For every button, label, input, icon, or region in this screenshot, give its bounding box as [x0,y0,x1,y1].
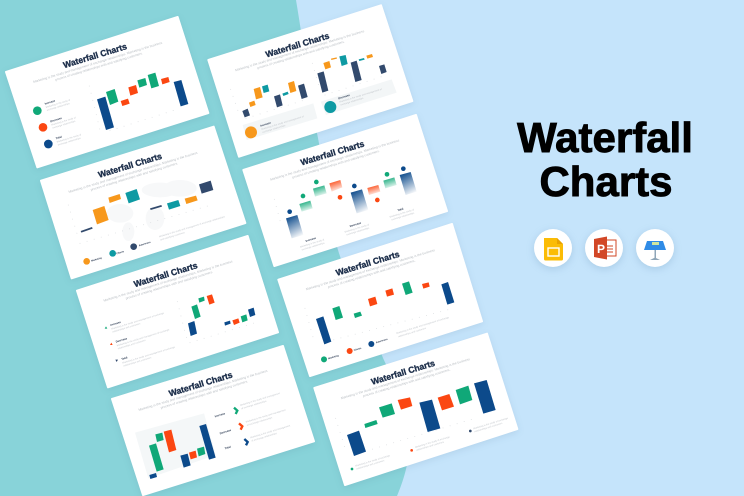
legend [33,99,81,148]
heading: Waterfall Charts [299,139,365,167]
axis ticks [68,204,213,243]
gradient waterfall chart [286,172,417,238]
legend: relationships and customers [117,339,146,350]
labels: exchange relationships [346,227,370,236]
descriptions: Marketing is the study and management [245,409,286,423]
left info panel [243,103,317,140]
legend [83,241,151,265]
descriptions: of exchange relationships [251,432,277,442]
heading: Waterfall Charts [335,249,401,278]
description: process of creating relationships with and satisfying customers. [125,270,214,300]
panel: slide 7 [112,346,314,495]
descriptions: of exchange relationships [246,416,273,427]
side note: and satisfying customers [160,231,185,241]
description: Marketing is the study and management of exchange relationships. Marketing is the business [235,29,365,72]
description: process of creating relationships with and satisfying customers. [327,259,416,289]
panel: slide 8 [314,334,517,485]
notes with bullets: Marketing is the study of exchange [355,454,390,467]
card background [6,17,208,167]
description: Marketing is the study and management of exchange relationships. Marketing is the business [340,357,470,400]
description: Marketing is the study and management of exchange relationships. Marketing is the business [33,41,163,84]
description: process of creating relationships with and satisfying customers. [362,368,451,398]
background: teal shape [0,0,410,496]
axis ticks [177,302,255,343]
decrease callout: Decrease [338,94,350,100]
axis ticks [89,86,175,131]
labels: exchange relationships [391,212,415,221]
waterfall chart [149,424,216,479]
card background [278,224,482,376]
increase callout [245,115,304,138]
description: Marketing is the study and management of exchange relationships. Marketing is the business [138,369,268,412]
labels: exchange relationships [301,242,325,251]
heading: Waterfall Charts [133,260,199,289]
axis ticks [305,308,453,342]
legend [321,338,388,362]
labels [300,207,415,251]
side note: Marketing is the study and management of exchange relationships [159,215,225,238]
heading: Waterfall Charts [97,151,163,180]
legend: Decrease [50,117,62,123]
side note: relationships and customers [398,327,426,338]
notes with bullets: Marketing is the study of exchange [473,417,508,430]
axis ticks [336,418,472,453]
legend: Marketing [328,354,339,360]
legend: Awareness [376,338,388,344]
legend labels: Decrease [219,429,232,435]
axis ticks [274,199,282,227]
legend: exchange relationships [57,137,81,146]
card background [41,127,245,278]
card background [112,346,314,495]
description: process of creating relationships with and satisfying customers. [160,380,249,410]
panel: slide 1 [6,17,208,167]
side note: Marketing is the study and management of exchange [396,316,449,335]
description: process of creating relationships with and satisfying customers. [292,149,380,179]
icon: Google Slides [534,229,572,267]
heading: Waterfall Charts [264,31,330,59]
legend: Marketing is the study and management of exchange [111,312,164,330]
icon: PowerPoint: P [597,242,605,256]
notes with bullets [351,417,508,470]
notes with bullets: relationships and customers [356,459,385,470]
waterfall chart [347,380,496,456]
increase callout: Marketing is the study and management of [261,115,304,131]
legend: Total [55,135,62,140]
decrease callout [324,88,382,113]
description: Marketing is the study and management of exchange relationships. Marketing is the business [270,139,400,182]
labels: Marketing is the study of [389,208,414,218]
legend: relationships and customers [112,322,141,333]
legend: Marketing [91,257,102,262]
panel: slide 3 [41,127,245,278]
legend: Marketing is the study and management of exchange [122,346,175,364]
decrease callout: exchange relationships [340,97,364,106]
waterfall chart [97,73,188,130]
legend: exchange relationships [52,120,76,129]
increase callout: Increase [260,121,271,127]
legend: Marketing is the study and management of exchange [116,328,170,347]
right info panel [321,79,397,115]
description: process of creating relationships with and satisfying customers. [55,52,143,82]
legend: Clients [353,347,362,352]
legend: Increase [44,99,56,105]
legend: Decrease [115,337,128,343]
notes with bullets: relationships and customers [474,422,503,433]
panel: slide 2 [208,5,412,157]
description: Marketing is the study and management of exchange relationships. Marketing is the business [305,248,435,291]
descriptions: Marketing is the study and management [240,392,280,407]
legend: Total [121,356,128,361]
labels: Increase [305,236,317,243]
increase callout: exchange relationships [262,124,286,134]
legend [105,312,175,367]
labels: Decrease [349,221,362,228]
panel: slide 6 [278,224,482,376]
main title: Waterfall [517,114,693,161]
legend labels: Total [224,445,231,450]
left waterfall chart [242,81,308,117]
notes with bullets: Marketing is the study of exchange [415,436,450,449]
card background [77,236,278,387]
card background [208,5,412,157]
legend: relationships and customers [123,356,152,367]
description: process of creating relationships with and satisfying customers. [90,162,179,192]
card background [243,115,447,266]
waterfall chart [81,181,213,233]
chevrons [234,408,248,445]
notes with bullets: relationships and customers [416,441,444,452]
heading: Waterfall Charts [168,370,234,398]
heading: Waterfall Charts [62,41,128,70]
legend: Marketing is the study of [51,116,76,126]
descriptions: Marketing is the study and management [250,424,291,439]
description: Marketing is the study and management of exchange relationships. Marketing is the business [103,260,233,303]
labels: Marketing is the study of [300,238,325,248]
decrease callout: Marketing is the study and management of [339,88,382,103]
right waterfall chart [317,54,387,93]
description: process of creating relationships with and satisfying customers. [257,40,345,70]
card background [314,334,517,485]
legend: Increase [110,321,121,327]
legend: exchange relationships [46,102,70,112]
main title [517,114,693,205]
panel: slide 5 [77,236,278,387]
legend: Marketing is the study of [56,133,81,143]
legend: Clients [116,250,124,255]
markers [287,166,406,214]
descriptions [240,392,291,442]
legend labels [214,412,232,450]
panel: slide 4 [243,115,447,266]
main title: Charts [539,158,673,205]
world map backdrop [107,180,197,241]
descriptions: of exchange relationships [241,400,267,410]
heading: Waterfall Charts [370,358,436,387]
waterfall chart [188,294,255,336]
axis ticks [231,63,387,118]
waterfall chart [316,281,454,344]
legend labels: Increase [214,412,226,418]
icon: Keynote [636,229,674,267]
description: Marketing is the study and management of exchange relationships. Marketing is the business [68,151,198,194]
labels: Marketing is the study of [344,223,369,233]
legend: Awareness [139,241,151,247]
icon: PowerPoint [585,229,623,267]
chart panel [135,413,216,478]
legend: Marketing is the study of [45,99,70,109]
labels: Total [397,207,404,212]
